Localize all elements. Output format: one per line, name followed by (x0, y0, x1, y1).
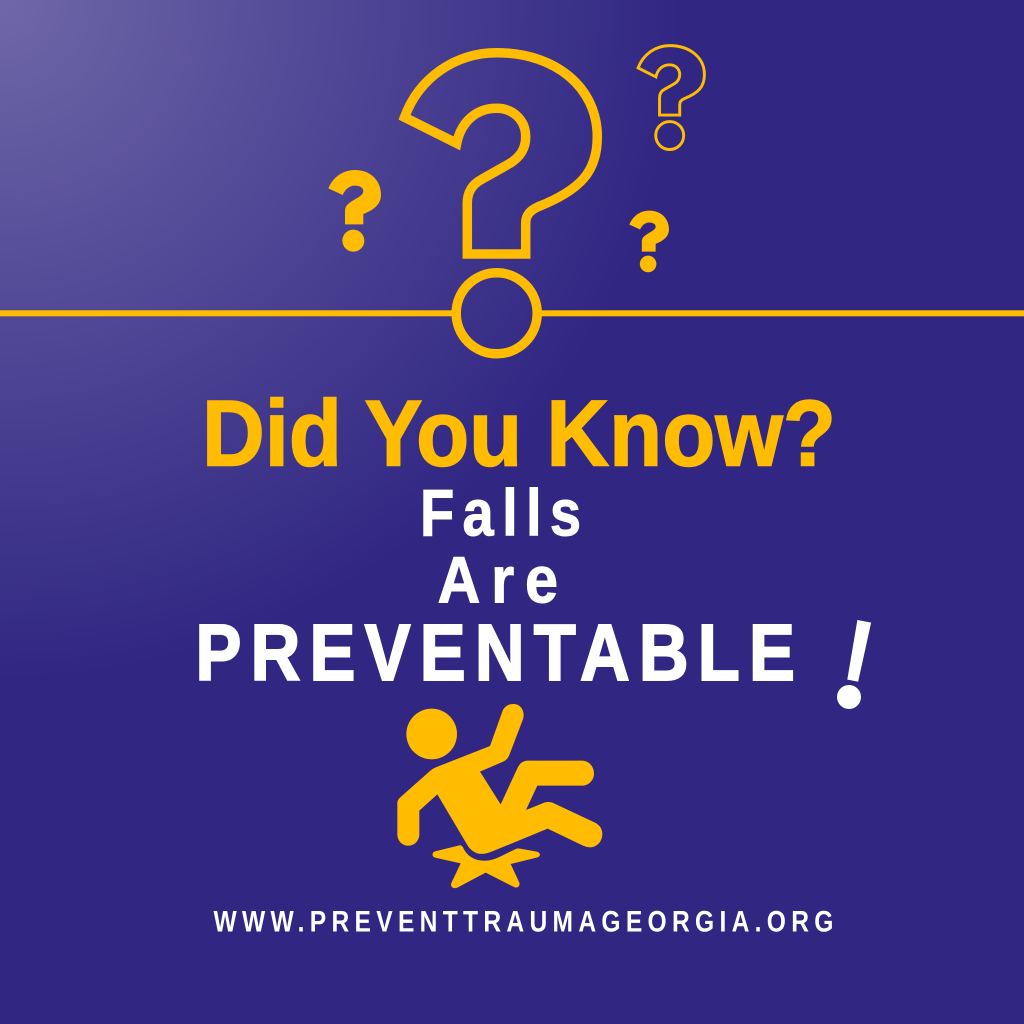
icon: large outlined question mark (404, 53, 597, 354)
horizontal rule (0, 310, 1024, 316)
text: exclamation mark: ! (826, 592, 885, 740)
icon: solid question mark right (629, 211, 669, 272)
icon: person falling (397, 704, 602, 888)
text: Falls: Falls (420, 476, 581, 550)
text: PREVENTABLE: PREVENTABLE (196, 607, 795, 697)
text: exclamation mark (837, 620, 872, 709)
website url: WWW.PREVENTTRAUMAGEORGIA.ORG (214, 904, 833, 938)
icon: solid question mark left (328, 170, 381, 252)
icon: small outlined question mark (638, 46, 704, 150)
heading: Did You Know? (202, 380, 836, 486)
text: Are: Are (438, 544, 558, 617)
